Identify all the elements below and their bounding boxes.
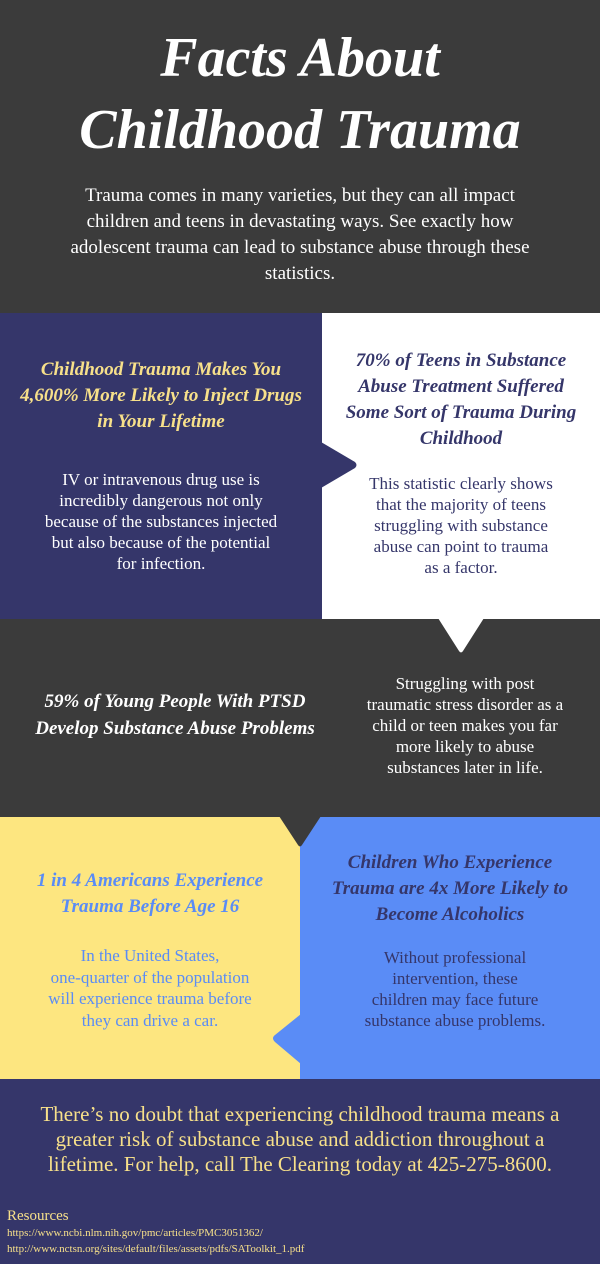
body text: abuse can point to trauma: [374, 537, 548, 556]
heading: Trauma Before Age 16: [61, 896, 239, 917]
heading: Trauma are 4x More Likely to: [332, 878, 568, 899]
heading: Children Who Experience: [348, 852, 552, 873]
header background: [0, 0, 600, 313]
heading: [20, 359, 302, 432]
intro text: adolescent trauma can lead to substance abuse through these: [70, 237, 530, 258]
heading: 59% of Young People With PTSD: [45, 691, 305, 712]
heading: [35, 691, 315, 739]
panel: 1 in 4: [0, 817, 300, 1079]
body text: but also because of the potential: [52, 533, 270, 552]
body text: they can drive a car.: [82, 1010, 218, 1030]
panel: 4600% inject drugs: [0, 313, 322, 619]
body text: substance abuse problems.: [365, 1011, 545, 1030]
conclusion text: [40, 1102, 560, 1176]
arrow: blue pointer left: [273, 1014, 300, 1063]
heading: [346, 350, 576, 449]
heading: 4,600% More Likely to Inject Drugs: [20, 385, 302, 406]
body text: IV or intravenous drug use is: [62, 470, 260, 489]
resources: [7, 1208, 304, 1255]
body text: Without professional: [384, 948, 526, 967]
heading: [332, 852, 568, 925]
arrow: white pointer down: [438, 619, 484, 652]
body text: because of the substances injected: [45, 512, 277, 531]
intro text: [70, 185, 530, 284]
body text: In the United States,: [81, 946, 219, 965]
body text: traumatic stress disorder as a: [367, 695, 563, 714]
body text: substances later in life.: [387, 758, 543, 777]
heading: 70% of Teens in Substance: [356, 350, 566, 371]
body text: intervention, these: [392, 969, 518, 988]
heading: Abuse Treatment Suffered: [358, 376, 564, 397]
body text: Struggling with post: [396, 674, 534, 693]
resources: Resources: [7, 1208, 69, 1224]
body text: incredibly dangerous not only: [59, 491, 263, 510]
heading: Childhood Trauma Makes You: [41, 359, 281, 380]
conclusion text: lifetime. For help, call The Clearing today at 425-275-8600.: [48, 1152, 552, 1176]
heading: Childhood: [420, 428, 502, 449]
title: Facts About: [160, 27, 440, 89]
heading: Develop Substance Abuse Problems: [35, 718, 315, 739]
conclusion text: greater risk of substance abuse and addiction throughout a: [56, 1127, 544, 1151]
arrow: dark pointer down: [280, 817, 320, 846]
title: [79, 27, 521, 161]
body text: for infection.: [117, 554, 205, 573]
body text: [365, 948, 545, 1030]
intro text: statistics.: [265, 263, 335, 284]
body text: will experience trauma before: [48, 989, 252, 1008]
body text: This statistic clearly shows: [369, 474, 553, 493]
footer panel: [0, 1079, 600, 1264]
panel: 70% teens: [322, 313, 600, 619]
heading: Some Sort of Trauma During: [346, 402, 576, 423]
body text: [44, 470, 277, 573]
heading: 1 in 4 Americans Experience: [37, 870, 263, 891]
heading: [37, 870, 263, 917]
panel: 4x alcoholics: [300, 817, 600, 1079]
conclusion text: There’s no doubt that experiencing childhood trauma means a: [40, 1102, 560, 1126]
body text: child or teen makes you far: [372, 716, 558, 735]
intro text: children and teens in devastating ways. See exactly how: [87, 211, 513, 232]
body text: struggling with substance: [374, 516, 548, 535]
body text: that the majority of teens: [376, 495, 546, 514]
intro text: Trauma comes in many varieties, but they can all impact: [85, 185, 515, 206]
heading: in Your Lifetime: [97, 411, 225, 432]
resources: https://www.ncbi.nlm.nih.gov/pmc/articles/PMC3051362/: [7, 1227, 263, 1239]
body text: [48, 946, 252, 1030]
title: Childhood Trauma: [79, 99, 521, 161]
resources: http://www.nctsn.org/sites/default/files/assets/pdfs/SAToolkit_1.pdf: [7, 1243, 304, 1255]
body text: more likely to abuse: [396, 737, 534, 756]
body text: one-quarter of the population: [51, 968, 249, 986]
body text: children may face future: [372, 990, 538, 1009]
panel: 59% PTSD: [0, 619, 600, 817]
body text: [369, 474, 553, 577]
body text: as a factor.: [424, 558, 498, 577]
body text: [366, 674, 563, 777]
arrow: navy pointer right: [322, 442, 356, 488]
heading: Become Alcoholics: [376, 904, 524, 925]
